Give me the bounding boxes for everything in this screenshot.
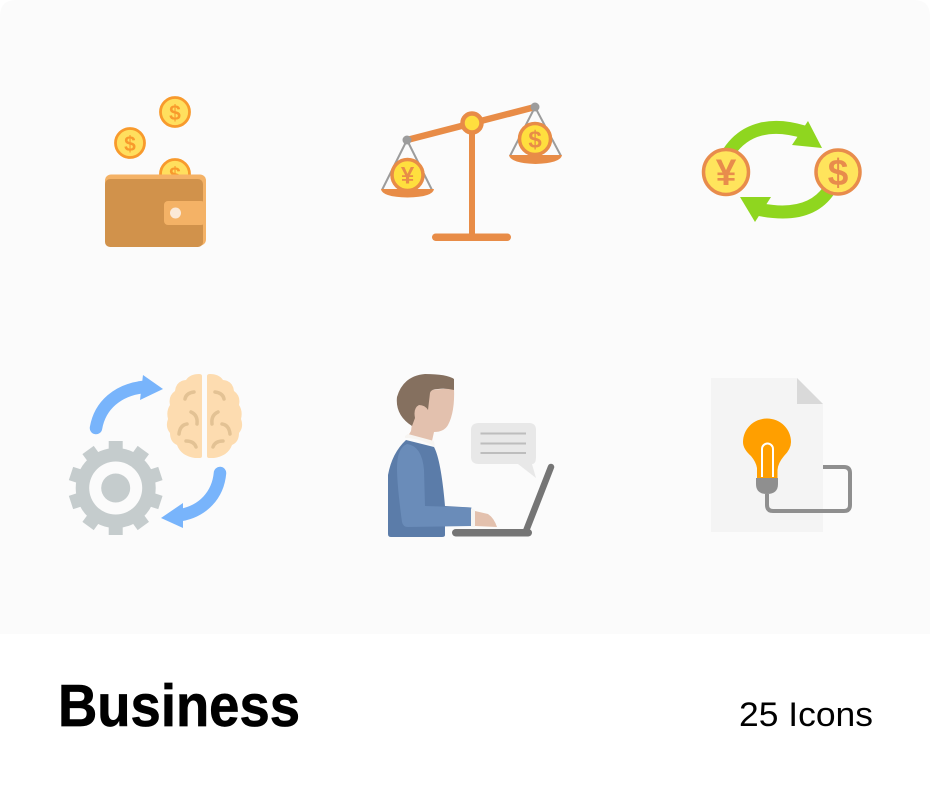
top green arrow bbox=[729, 121, 822, 152]
wallet body bbox=[105, 174, 206, 247]
coin entering wallet: $ bbox=[169, 164, 181, 187]
cable bbox=[767, 467, 850, 511]
icon: brain and gear cycle bbox=[69, 374, 242, 535]
left pan strings bbox=[382, 140, 432, 190]
beam bbox=[407, 107, 535, 140]
yen coin: ¥ bbox=[716, 152, 737, 193]
dollar coin: $ bbox=[528, 126, 542, 154]
speech bubble bbox=[471, 423, 536, 478]
icon: balance scale bbox=[381, 102, 562, 241]
title: Business bbox=[58, 673, 300, 739]
collar bbox=[405, 434, 435, 447]
yen coin bbox=[392, 160, 423, 190]
coin entering wallet bbox=[160, 160, 190, 188]
document bbox=[711, 378, 823, 532]
icon: man working at laptop bbox=[388, 374, 551, 537]
dollar coin bbox=[520, 124, 550, 154]
upper blue arrow bbox=[96, 375, 163, 428]
coin top bbox=[160, 98, 190, 126]
icon: currency exchange bbox=[704, 121, 860, 222]
coin left bbox=[116, 128, 144, 158]
right pan bbox=[509, 155, 562, 164]
post and base bbox=[469, 125, 475, 237]
sleeve bbox=[397, 444, 472, 527]
gear bbox=[69, 441, 163, 535]
coin left: $ bbox=[124, 133, 136, 156]
folded corner bbox=[797, 378, 823, 404]
icon: document with light bulb bbox=[711, 378, 850, 532]
hair bbox=[397, 374, 454, 426]
pivot bbox=[462, 114, 482, 132]
icon count: 25 Icons bbox=[739, 696, 873, 734]
laptop bbox=[452, 467, 551, 536]
bottom green arrow bbox=[740, 190, 829, 222]
neck and face bbox=[408, 388, 454, 441]
left pan bbox=[381, 189, 434, 198]
coin top: $ bbox=[169, 102, 181, 125]
shirt cuff bbox=[471, 508, 475, 527]
right pan strings bbox=[510, 107, 561, 156]
yen coin bbox=[704, 150, 748, 194]
dollar coin: $ bbox=[828, 152, 849, 193]
dollar coin bbox=[816, 150, 860, 194]
bulb bbox=[743, 418, 791, 479]
torso bbox=[388, 440, 472, 537]
brain bbox=[167, 374, 242, 458]
yen coin: ¥ bbox=[401, 162, 415, 190]
icon: wallet with coins bbox=[105, 98, 206, 247]
bulb base bbox=[756, 478, 778, 494]
filament bbox=[762, 444, 773, 477]
hand bbox=[475, 511, 497, 527]
lower blue arrow bbox=[161, 473, 220, 528]
